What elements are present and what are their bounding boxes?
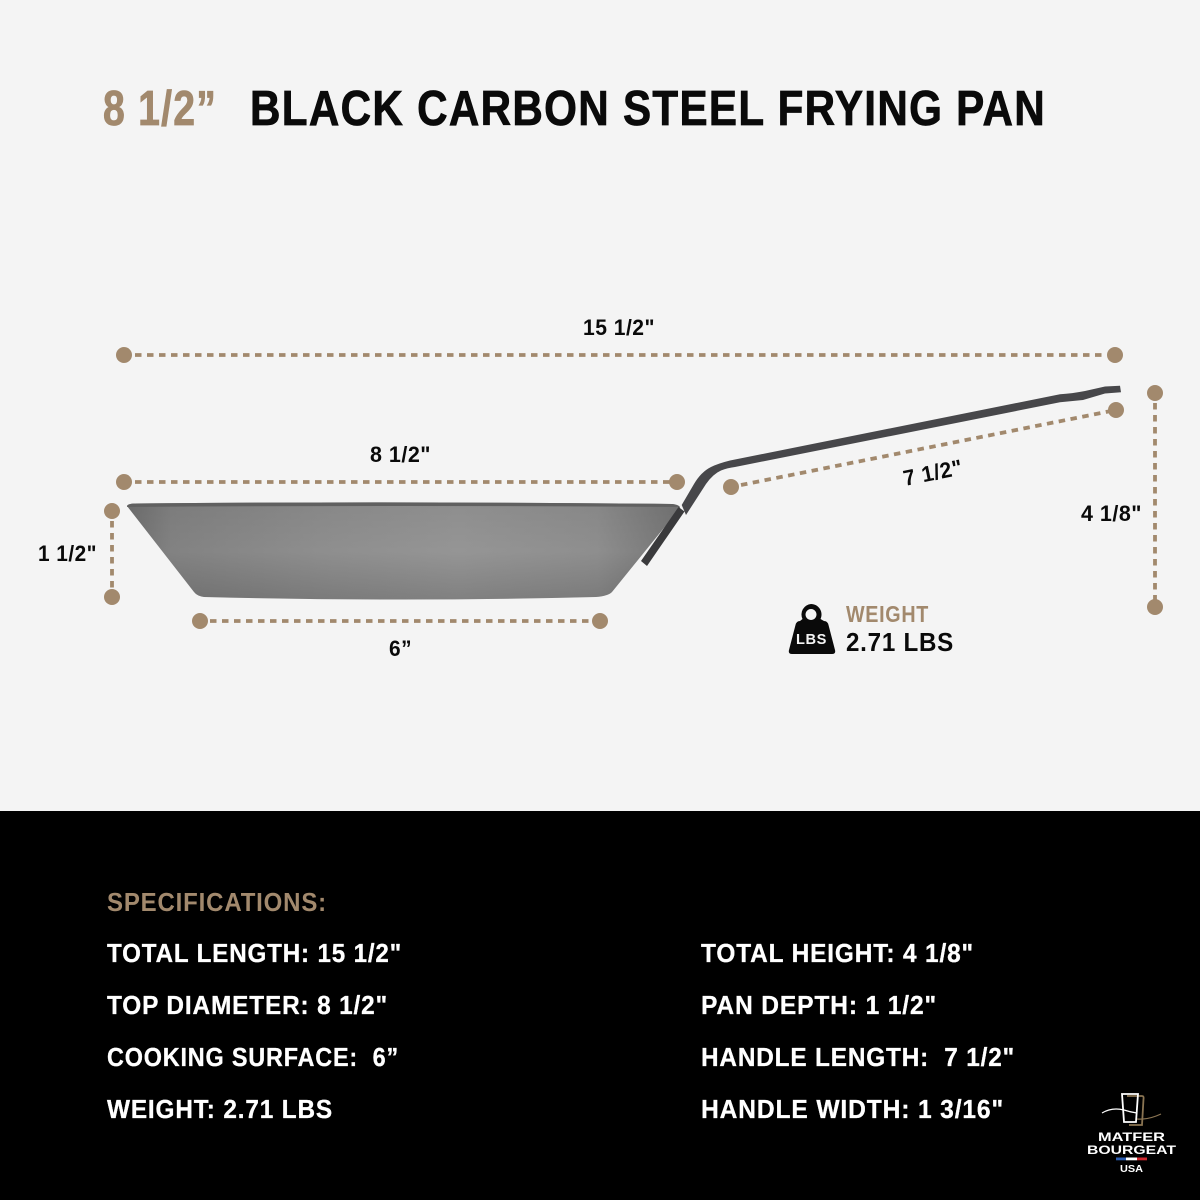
logo: Matfer Bourgeat USA: USA <box>1120 1164 1143 1175</box>
panel: specifications <box>0 811 1200 1200</box>
icon: tricolor bar <box>1116 1158 1147 1160</box>
icon: logo glasses <box>1102 1094 1161 1125</box>
specifications heading: SPECIFICATIONS: <box>107 887 327 917</box>
right spec column: TOTAL HEIGHT: 4 1/8" <box>701 938 974 968</box>
dimension: total length <box>116 315 1123 363</box>
dimension: handle length: 7 1/2" <box>901 454 965 491</box>
dimension: cooking surface <box>192 613 608 661</box>
left spec column: WEIGHT: 2.71 LBS <box>107 1094 333 1124</box>
right spec column <box>701 938 1015 1124</box>
dimension: pan depth <box>38 503 120 605</box>
dimension: pan depth: 1 1/2" <box>38 541 97 566</box>
icon: weight: LBS <box>796 631 827 648</box>
dimension: handle length <box>723 402 1124 495</box>
icon: weight <box>789 604 835 654</box>
left spec column: TOTAL LENGTH: 15 1/2" <box>107 938 402 968</box>
weight callout <box>789 601 954 657</box>
dimension: total height <box>1081 385 1163 615</box>
dimension: top diameter <box>116 442 685 490</box>
weight callout: WEIGHT <box>846 601 929 627</box>
dimension: top diameter: 8 1/2" <box>370 442 431 467</box>
logo: Matfer Bourgeat USA: BOURGEAT <box>1087 1145 1176 1157</box>
right spec column: HANDLE WIDTH: 1 3/16" <box>701 1094 1004 1124</box>
rivet plate <box>641 507 684 566</box>
background <box>0 0 1200 811</box>
left spec column: COOKING SURFACE: 6” <box>107 1042 399 1072</box>
right spec column: HANDLE LENGTH: 7 1/2" <box>701 1042 1015 1072</box>
right spec column: PAN DEPTH: 1 1/2" <box>701 990 937 1020</box>
logo: Matfer Bourgeat USA: MATFER <box>1098 1132 1166 1144</box>
title: 8 1/2” <box>103 82 217 136</box>
pan rim <box>127 502 680 507</box>
left spec column: TOP DIAMETER: 8 1/2" <box>107 990 388 1020</box>
title: BLACK CARBON STEEL FRYING PAN <box>250 82 1046 136</box>
left spec column <box>107 938 402 1124</box>
pan handle <box>682 386 1121 515</box>
logo: Matfer Bourgeat USA <box>1087 1094 1176 1175</box>
dimension: cooking surface: 6” <box>389 636 412 661</box>
frying pan illustration <box>127 386 1121 600</box>
weight callout: 2.71 LBS <box>846 627 954 657</box>
dimension: total length: 15 1/2" <box>583 315 655 340</box>
pan body <box>127 502 680 600</box>
dimension: total height: 4 1/8" <box>1081 501 1142 526</box>
